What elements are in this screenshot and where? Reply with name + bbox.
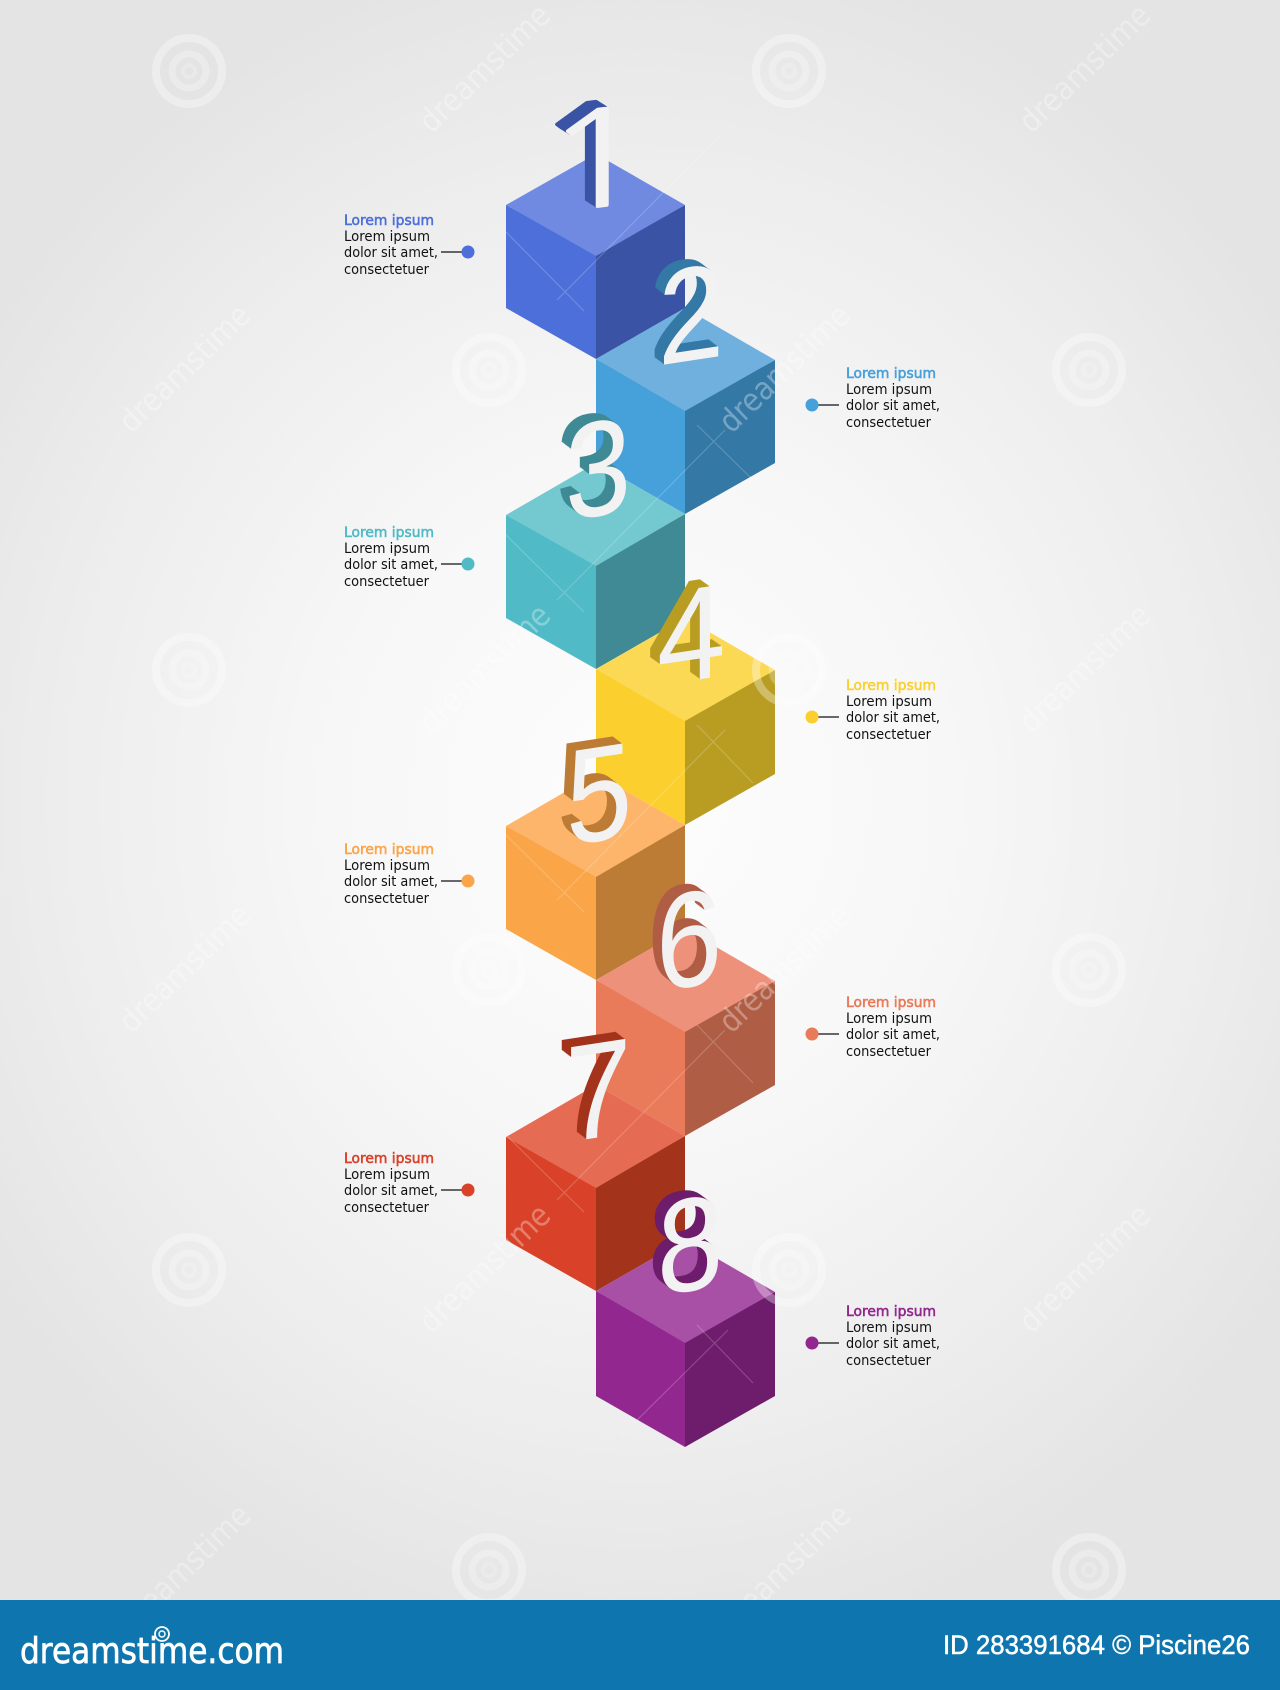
- cube 7: [506, 1085, 685, 1291]
- callout 5: dolor sit amet,: [344, 874, 438, 890]
- callout 4: Lorem ipsum: [846, 694, 932, 710]
- callout 3: Lorem ipsum: [344, 541, 430, 557]
- number 5: 5: [566, 712, 632, 875]
- number 7: 7: [565, 1008, 631, 1172]
- number 8: 8: [657, 1165, 723, 1324]
- cube 2: [596, 308, 775, 514]
- watermark text: dreamstime: [711, 1496, 858, 1640]
- callout 6: Lorem ipsum: [846, 1011, 932, 1027]
- callout 8: [806, 1304, 940, 1369]
- cube 4: [596, 618, 775, 825]
- callout 6: consectetuer: [846, 1044, 931, 1060]
- watermark text: dreamstime: [1011, 1196, 1158, 1340]
- callout 7: dolor sit amet,: [344, 1183, 438, 1199]
- callout 1: Lorem ipsum: [344, 229, 430, 245]
- callout 5: Lorem ipsum: [344, 842, 434, 858]
- watermark spirals: [156, 38, 1122, 1603]
- footer band: ID 283391684 © Piscine26: [943, 1630, 1250, 1660]
- watermark text: dreamstime: [111, 896, 258, 1040]
- callout 1: consectetuer: [344, 262, 429, 278]
- callout 8: dolor sit amet,: [846, 1336, 940, 1352]
- callout 2: Lorem ipsum: [846, 382, 932, 398]
- callout 8: Lorem ipsum: [846, 1320, 932, 1336]
- watermark text: dreamstime: [711, 896, 858, 1040]
- callout 3: [344, 525, 474, 590]
- callout 4: Lorem ipsum: [846, 678, 936, 694]
- cube 6: [596, 929, 775, 1136]
- callout 7: consectetuer: [344, 1200, 429, 1216]
- callout 8: consectetuer: [846, 1353, 931, 1369]
- callout 5: [344, 842, 474, 907]
- watermark text: dreamstime: [1011, 596, 1158, 740]
- number 3: 3: [565, 387, 631, 550]
- watermark text: dreamstime: [411, 596, 558, 740]
- callout 7: Lorem ipsum: [344, 1151, 434, 1167]
- callout 2: consectetuer: [846, 415, 931, 431]
- callout 2: Lorem ipsum: [846, 366, 936, 382]
- number 2: 2: [658, 233, 724, 394]
- callout 5: Lorem ipsum: [344, 858, 430, 874]
- cube 8: [596, 1240, 775, 1447]
- watermark text: dreamstime: [711, 296, 858, 440]
- callout 8: Lorem ipsum: [846, 1304, 936, 1320]
- footer band: [0, 1600, 1280, 1690]
- callout 4: [806, 678, 940, 743]
- callout 6: dolor sit amet,: [846, 1027, 940, 1043]
- callout 7: [344, 1151, 474, 1216]
- callout 1: dolor sit amet,: [344, 245, 438, 261]
- watermark text: dreamstime: [111, 296, 258, 440]
- callout 5: consectetuer: [344, 891, 429, 907]
- cube 3: [506, 463, 685, 669]
- callout 2: dolor sit amet,: [846, 398, 940, 414]
- number 6: 6: [656, 858, 722, 1021]
- watermark text: dreamstime: [111, 1496, 258, 1640]
- callout 2: [806, 366, 940, 431]
- callout 6: [806, 995, 940, 1060]
- callout 3: Lorem ipsum: [344, 525, 434, 541]
- callout 7: Lorem ipsum: [344, 1167, 430, 1183]
- callout 3: dolor sit amet,: [344, 557, 438, 573]
- callout 4: dolor sit amet,: [846, 710, 940, 726]
- callout 1: Lorem ipsum: [344, 213, 434, 229]
- footer band: dreamstime.com: [20, 1631, 284, 1672]
- callout 6: Lorem ipsum: [846, 995, 936, 1011]
- callout 4: consectetuer: [846, 727, 931, 743]
- callout 1: [344, 213, 474, 278]
- cube 5: [506, 774, 685, 980]
- number 1: 1: [539, 86, 654, 235]
- cube 1: [506, 154, 685, 359]
- watermark text: [111, 0, 1158, 1640]
- number 4: 4: [657, 555, 726, 714]
- watermark text: dreamstime: [411, 1196, 558, 1340]
- callout 3: consectetuer: [344, 574, 429, 590]
